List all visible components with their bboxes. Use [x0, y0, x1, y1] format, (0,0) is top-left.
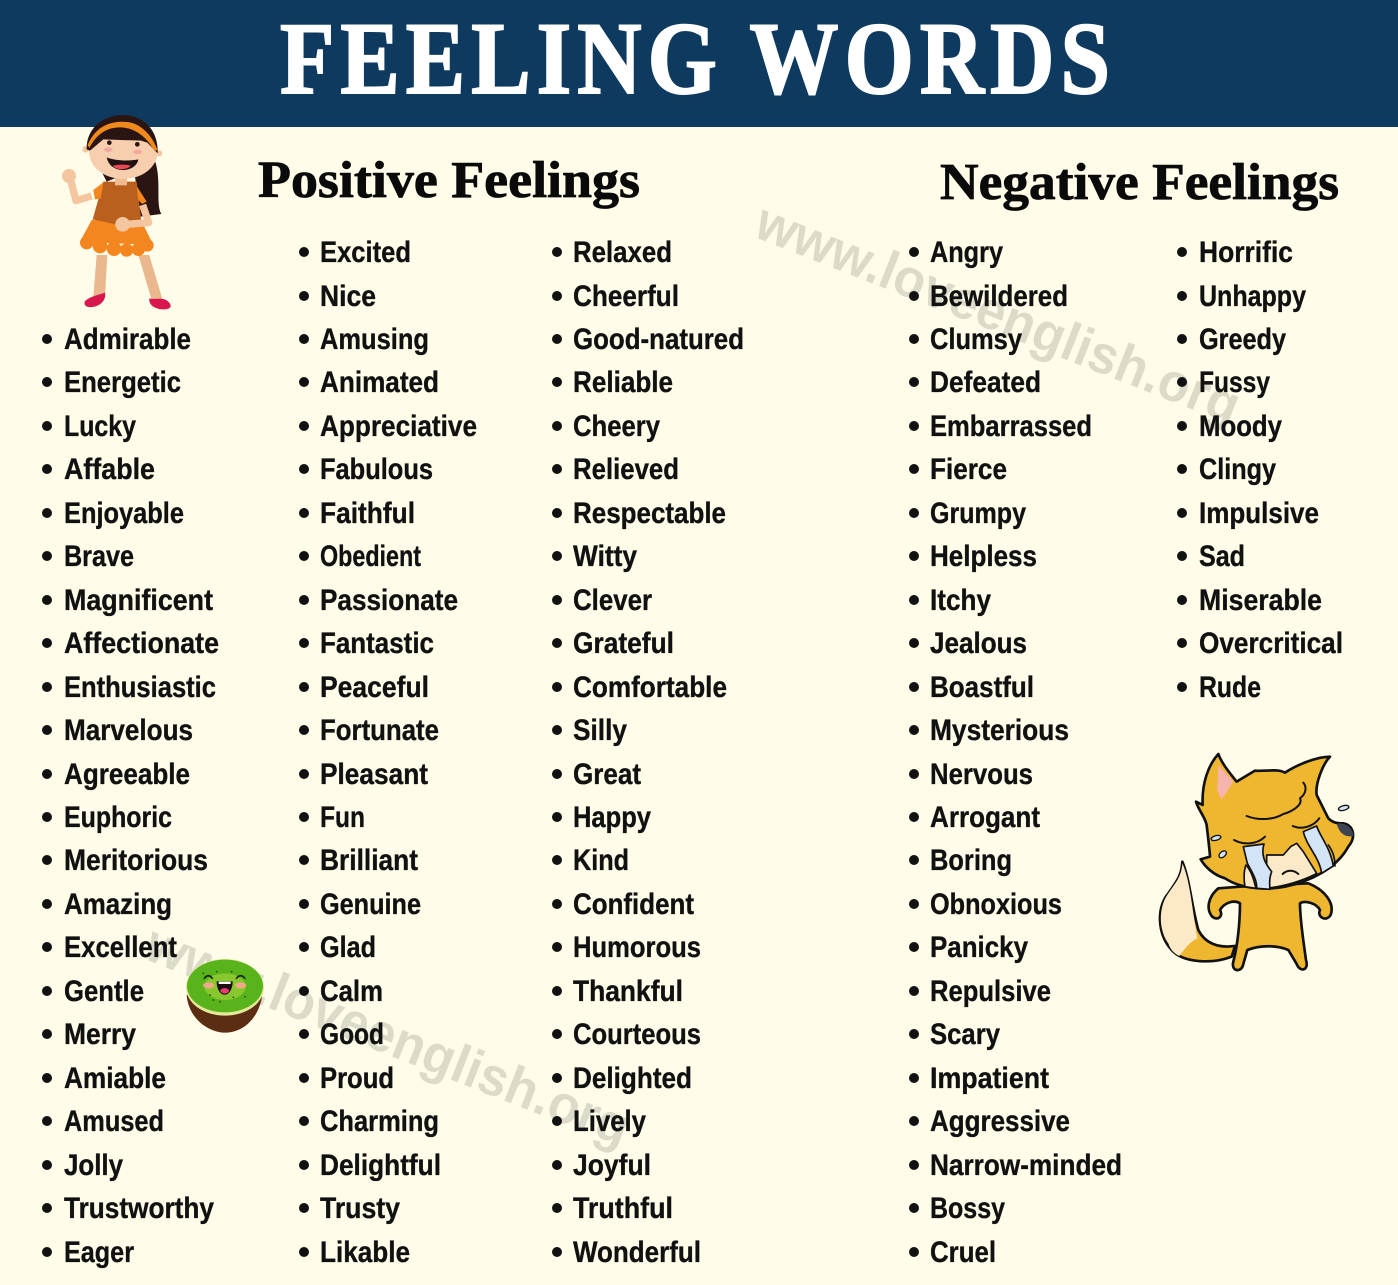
word list: negative column 2: Moody: [1199, 410, 1282, 443]
word list: positive column 3: Humorous: [573, 931, 701, 964]
word list: positive column 1: Enjoyable: [64, 497, 184, 530]
word list: positive column 3: Silly: [573, 714, 627, 747]
word list: positive column 2: Fantastic: [320, 627, 434, 660]
word list: negative column 1: Clumsy: [930, 323, 1022, 356]
word list: positive column 2: Obedient: [320, 540, 421, 573]
word list: positive column 1: Affable: [64, 453, 155, 486]
word list: positive column 3: Reliable: [573, 366, 673, 399]
word list: negative column 1: Narrow-minded: [930, 1149, 1122, 1182]
word list: positive column 1: Magnificent: [64, 584, 213, 617]
word list: positive column 3: Truthful: [573, 1192, 673, 1225]
word list: positive column 2: Fun: [320, 801, 365, 834]
header banner: [0, 0, 1398, 127]
word list: positive column 2: Glad: [320, 931, 376, 964]
watermark: bottom left: www.loveenglish.org: [137, 913, 639, 1158]
word list: positive column 2: Brilliant: [320, 844, 418, 877]
word list: negative column 1: Boastful: [930, 671, 1034, 704]
word list: positive column 3: Good-natured: [573, 323, 744, 356]
word list: positive column 3: Great: [573, 758, 641, 791]
word list: positive column 1: Euphoric: [64, 801, 172, 834]
word list: positive column 3: Wonderful: [573, 1236, 701, 1269]
word list: positive column 2: Pleasant: [320, 758, 428, 791]
word list: positive column 2: Peaceful: [320, 671, 429, 704]
word list: positive column 3: Joyful: [573, 1149, 651, 1182]
word list: positive column 2: Likable: [320, 1236, 410, 1269]
word list: positive column 1: Admirable: [64, 323, 191, 356]
word list: positive column 2: Proud: [320, 1062, 394, 1095]
word list: positive column 2: Good: [320, 1018, 384, 1051]
word list: negative column 2: Clingy: [1199, 453, 1276, 486]
word list: positive column 1: Gentle: [64, 975, 144, 1008]
word list: negative column 1: Aggressive: [930, 1105, 1070, 1138]
word list: positive column 1: Jolly: [64, 1149, 123, 1182]
word list: positive column 3: Clever: [573, 584, 652, 617]
word list: negative column 1: Arrogant: [930, 801, 1040, 834]
word list: negative column 1: Boring: [930, 844, 1012, 877]
word list: negative column 1: Defeated: [930, 366, 1041, 399]
fox nose: [1337, 824, 1353, 836]
word list: negative column 1: Angry: [930, 236, 1003, 269]
word list: positive column 3: Courteous: [573, 1018, 701, 1051]
fox tail: [1160, 862, 1235, 961]
word list: negative column 1: Mysterious: [930, 714, 1069, 747]
word list: negative column 2: [1177, 236, 1343, 704]
word list: positive column 3: Respectable: [573, 497, 726, 530]
word list: positive column 1: Eager: [64, 1236, 134, 1269]
word list: positive column 2: Charming: [320, 1105, 439, 1138]
word list: positive column 1: Lucky: [64, 410, 136, 443]
word list: positive column 1: [42, 323, 219, 1269]
fox tears and muzzle: [1243, 826, 1335, 889]
word list: positive column 2: [299, 236, 477, 1269]
word list: positive column 2: Appreciative: [320, 410, 477, 443]
word list: negative column 2: Rude: [1199, 671, 1261, 704]
word list: negative column 2: Overcritical: [1199, 627, 1343, 660]
word list: positive column 2: Amusing: [320, 323, 429, 356]
heading: Negative Feelings: Negative Feelings: [940, 154, 1339, 211]
word list: negative column 2: Miserable: [1199, 584, 1322, 617]
word list: negative column 2: Horrific: [1199, 236, 1293, 269]
word list: positive column 2: Genuine: [320, 888, 421, 921]
word list: positive column 3: Kind: [573, 844, 629, 877]
word list: positive column 3: Lively: [573, 1105, 646, 1138]
word list: positive column 1: Trustworthy: [64, 1192, 214, 1225]
word list: positive column 3: Delighted: [573, 1062, 692, 1095]
word list: positive column 1: Excellent: [64, 931, 177, 964]
word list: negative column 1: Repulsive: [930, 975, 1051, 1008]
fox sweat drops: [1211, 804, 1349, 859]
word list: negative column 1: Scary: [930, 1018, 1000, 1051]
word list: positive column 1: Energetic: [64, 366, 181, 399]
word list: negative column 1: Helpless: [930, 540, 1037, 573]
word list: positive column 3: Relieved: [573, 453, 679, 486]
fox head: [1196, 754, 1353, 889]
word list: positive column 1: Merry: [64, 1018, 136, 1051]
word list: negative column 1: Impatient: [930, 1062, 1049, 1095]
word list: negative column 1: Bossy: [930, 1192, 1005, 1225]
word list: negative column 2: Impulsive: [1199, 497, 1319, 530]
word list: negative column 1: [909, 236, 1122, 1269]
word list: negative column 2: Unhappy: [1199, 280, 1306, 313]
fox ear: [1217, 765, 1233, 800]
word list: negative column 2: Greedy: [1199, 323, 1286, 356]
heading: Positive Feelings: Positive Feelings: [258, 152, 640, 209]
word list: positive column 1: Agreeable: [64, 758, 190, 791]
word list: positive column 2: Trusty: [320, 1192, 400, 1225]
word list: positive column 2: Excited: [320, 236, 411, 269]
word list: positive column 3: Cheery: [573, 410, 660, 443]
fox closed eyes and fur lines: [1234, 783, 1319, 874]
word list: negative column 2: Sad: [1199, 540, 1245, 573]
title: FEELING WORDS: [280, 2, 1116, 116]
word list: positive column 3: Happy: [573, 801, 651, 834]
word list: positive column 1: Brave: [64, 540, 134, 573]
word list: positive column 3: Thankful: [573, 975, 683, 1008]
word list: positive column 2: Passionate: [320, 584, 458, 617]
word list: positive column 3: Confident: [573, 888, 694, 921]
icon: smiling girl in orange dress: [62, 115, 171, 309]
word list: positive column 3: Grateful: [573, 627, 674, 660]
word list: negative column 1: Fierce: [930, 453, 1007, 486]
word list: positive column 1: Enthusiastic: [64, 671, 216, 704]
word list: negative column 2: Fussy: [1199, 366, 1270, 399]
icon: kiwi with smiling face: [186, 959, 264, 1033]
icon: crying fox: [1160, 754, 1353, 970]
word list: positive column 2: Fabulous: [320, 453, 433, 486]
word list: positive column 1: Meritorious: [64, 844, 208, 877]
word list: positive column 3: [552, 236, 744, 1269]
word list: positive column 1: Affectionate: [64, 627, 219, 660]
word list: positive column 1: Amazing: [64, 888, 172, 921]
word list: negative column 1: Cruel: [930, 1236, 996, 1269]
word list: negative column 1: Nervous: [930, 758, 1033, 791]
word list: negative column 1: Itchy: [930, 584, 991, 617]
word list: positive column 1: Amused: [64, 1105, 164, 1138]
word list: negative column 1: Panicky: [930, 931, 1028, 964]
word list: negative column 1: Jealous: [930, 627, 1027, 660]
word list: positive column 2: Nice: [320, 280, 376, 313]
word list: negative column 1: Bewildered: [930, 280, 1068, 313]
word list: positive column 3: Relaxed: [573, 236, 672, 269]
word list: positive column 2: Fortunate: [320, 714, 439, 747]
word list: positive column 3: Cheerful: [573, 280, 679, 313]
word list: positive column 2: Calm: [320, 975, 383, 1008]
word list: negative column 1: Obnoxious: [930, 888, 1062, 921]
word list: positive column 1: Marvelous: [64, 714, 193, 747]
word list: positive column 3: Comfortable: [573, 671, 727, 704]
word list: positive column 2: Delightful: [320, 1149, 441, 1182]
word list: positive column 2: Animated: [320, 366, 439, 399]
word list: positive column 1: Amiable: [64, 1062, 166, 1095]
fox body: [1209, 883, 1332, 970]
watermark: top right: www.loveenglish.org: [747, 191, 1249, 436]
word list: negative column 1: Grumpy: [930, 497, 1026, 530]
word list: negative column 1: Embarrassed: [930, 410, 1092, 443]
word list: positive column 3: Witty: [573, 540, 637, 573]
word list: positive column 2: Faithful: [320, 497, 415, 530]
